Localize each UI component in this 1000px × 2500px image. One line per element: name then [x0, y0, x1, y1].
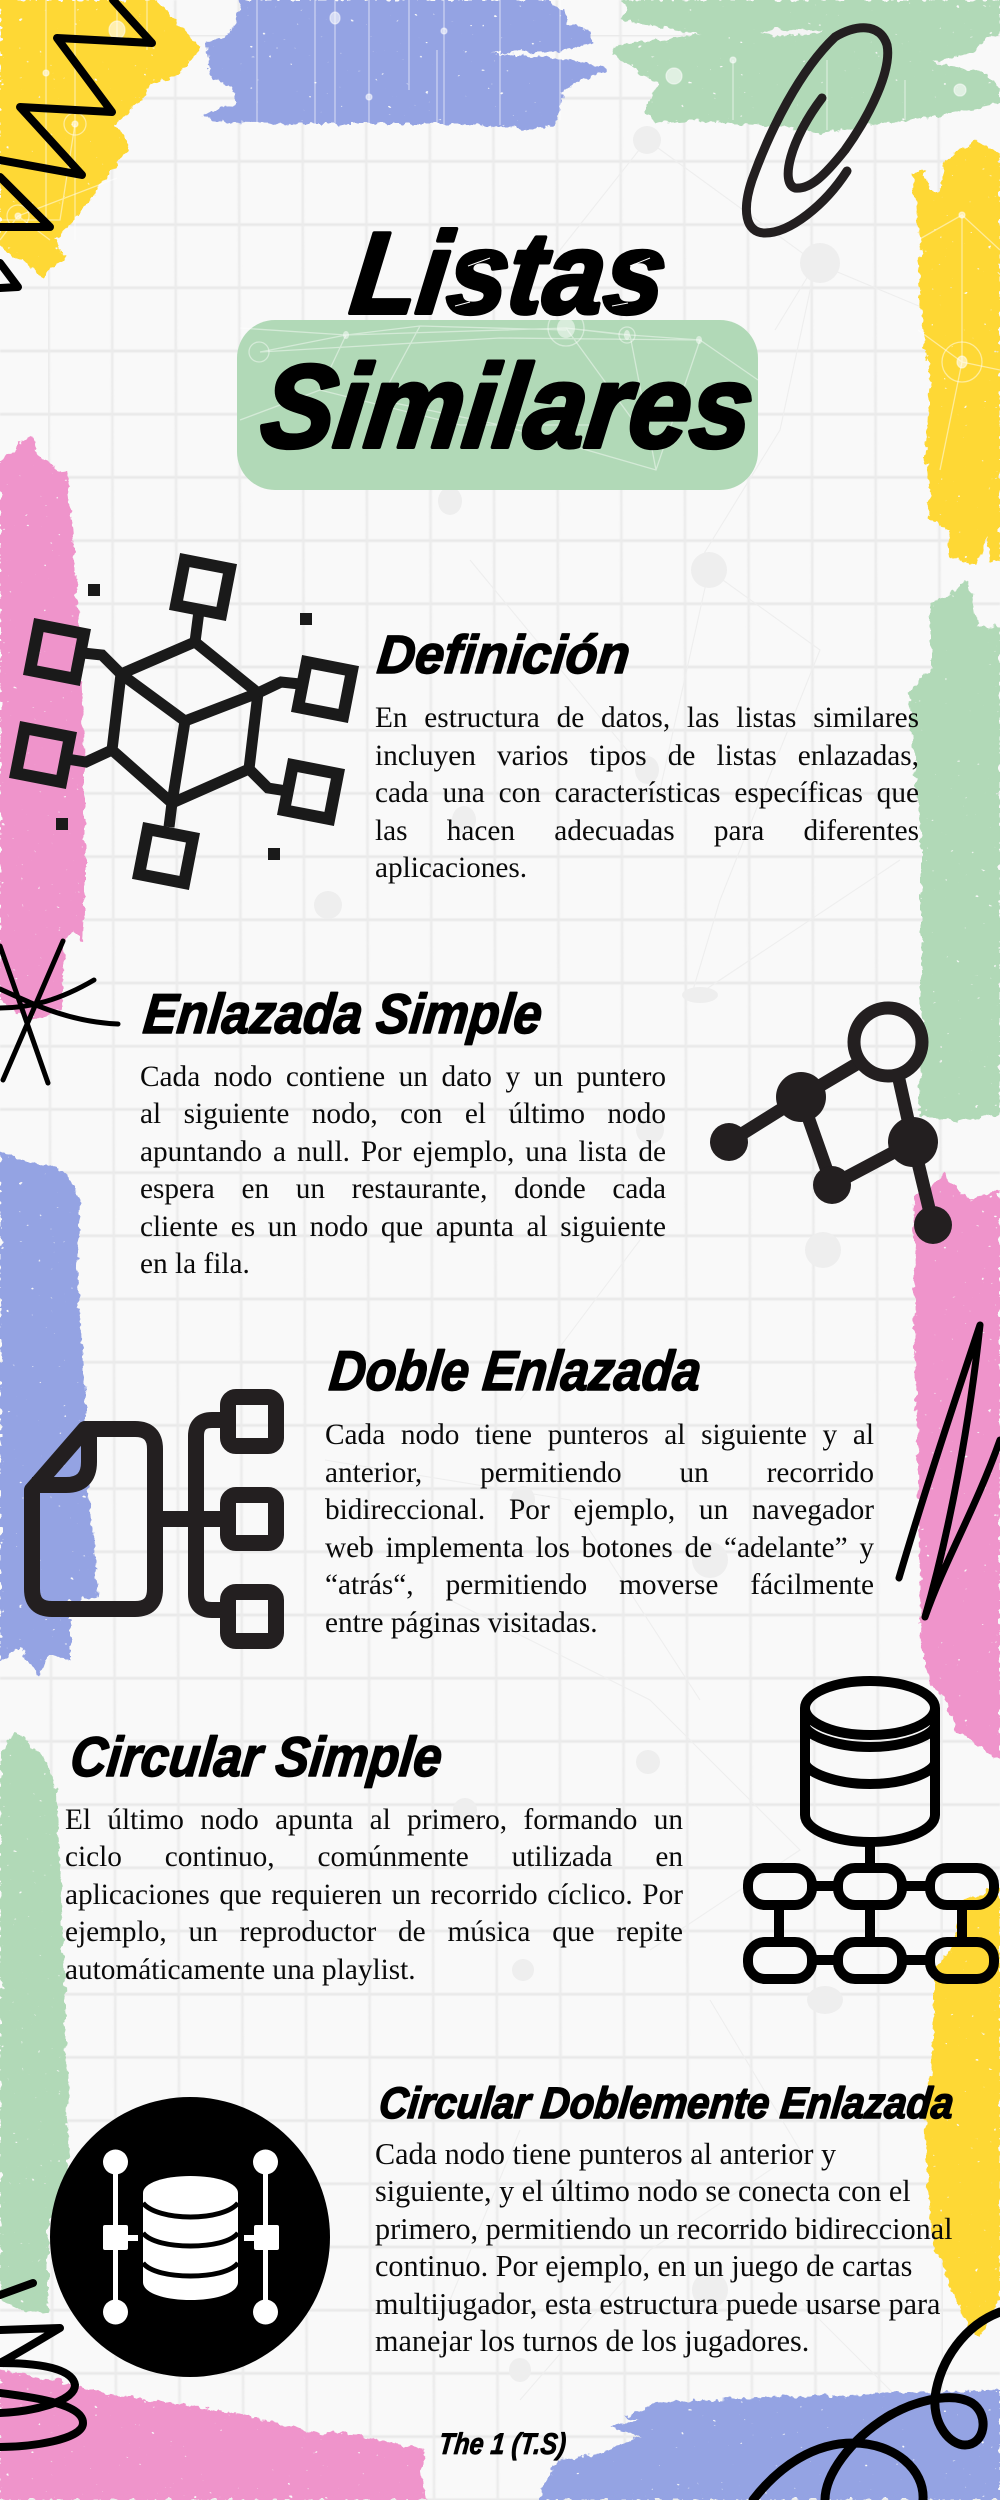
text: Doble Enlazada body: Cada nodo tiene punteros al siguiente y al	[325, 1419, 874, 1451]
text: Circular Simple body: automáticamente una playlist.	[65, 1954, 416, 1986]
text: Circular Simple body: aplicaciones que requieren un recorrido cíclico. Por	[65, 1878, 683, 1910]
brush: blue left	[0, 1152, 99, 1675]
heading: Circular Doblemente Enlazada: Circular Doblemente Enlazada	[377, 2079, 956, 2128]
text: Definición body: cada una con características específicas que	[375, 777, 919, 809]
text: Enlazada Simple body: cliente es un nodo que apunta al siguiente	[140, 1210, 666, 1242]
icon: hexagon network	[16, 560, 352, 883]
brush: blue top	[202, 0, 606, 129]
brush: pink bottom	[0, 2370, 427, 2500]
doodle: curl bottom right	[753, 2312, 1000, 2500]
text: Definición body	[375, 702, 919, 884]
text: Circular Doblemente Enlazada body: manejar los turnos de los jugadores.	[375, 2324, 809, 2358]
text: Circular Doblemente Enlazada body	[375, 2136, 953, 2358]
text: Doble Enlazada body: bidireccional. Por ejemplo, un navegador	[325, 1494, 874, 1526]
text: Doble Enlazada body: “atrás“, permitiendo moverse fácilmente	[325, 1569, 874, 1601]
brush: yellow top left	[0, 0, 200, 280]
text: Circular Simple body	[65, 1804, 683, 1986]
text: Definición body: En estructura de datos, las listas similares	[375, 702, 919, 734]
brush: pink right	[914, 1171, 1000, 1762]
text: Circular Simple body: ejemplo, un reproductor de música que repite	[65, 1916, 683, 1948]
text: Doble Enlazada body: anterior, permitiendo un recorrido	[325, 1456, 874, 1488]
text: Circular Doblemente Enlazada body: Cada nodo tiene punteros al anterior y	[375, 2136, 836, 2170]
footer credit: The 1 (T.S)	[437, 2428, 568, 2461]
heading: Definición: Definición	[375, 625, 633, 685]
text: Doble Enlazada body	[325, 1419, 874, 1638]
text: Circular Doblemente Enlazada body: siguiente, y el último nodo se conecta con el	[375, 2174, 911, 2208]
doodle: scrawl right	[899, 1325, 1000, 1617]
text: Circular Doblemente Enlazada body: primero, permitiendo un recorrido bidireccional	[375, 2212, 953, 2246]
text: Definición body: las hacen adecuadas para diferentes	[375, 814, 919, 846]
text: Circular Simple body: ciclo continuo, comúnmente utilizada en	[65, 1841, 683, 1873]
heading: Circular Simple: Circular Simple	[68, 1725, 445, 1788]
text: Enlazada Simple body: espera en un restaurante, donde cada	[140, 1173, 666, 1205]
doodle: paperclip	[746, 28, 888, 233]
brush: green top	[612, 0, 1000, 133]
text: Enlazada Simple body: Cada nodo contiene un dato y un puntero	[140, 1060, 666, 1092]
title backing: green rounded box	[237, 310, 758, 490]
heading: Doble Enlazada: Doble Enlazada	[327, 1339, 704, 1402]
title: Listas: Listas	[345, 208, 674, 338]
brush: green left	[0, 1730, 70, 2313]
network overlay on brush strokes	[0, 0, 1000, 470]
doodle: asterisk left	[0, 941, 118, 1083]
text: Enlazada Simple body	[140, 1060, 666, 1280]
text: Definición body: aplicaciones.	[375, 852, 527, 884]
heading: Enlazada Simple: Enlazada Simple	[141, 982, 545, 1045]
brush: yellow bottom right	[925, 1886, 1000, 2338]
icon: black circle database	[50, 2097, 330, 2377]
text: Doble Enlazada body: entre páginas visitadas.	[325, 1606, 598, 1638]
text: Circular Simple body: El último nodo apunta al primero, formando un	[65, 1804, 683, 1836]
text: Enlazada Simple body: al siguiente nodo, con el último nodo	[140, 1098, 666, 1130]
text: Enlazada Simple body: en la fila.	[140, 1248, 250, 1280]
text: Circular Doblemente Enlazada body: multijugador, esta estructura puede usarse para	[375, 2286, 940, 2320]
brush: blue bottom	[536, 2390, 1000, 2500]
title: Similares: Similares	[255, 341, 761, 473]
text: Doble Enlazada body: web implementa los botones de “adelante” y	[325, 1532, 874, 1564]
brush: white streak on green	[760, 29, 825, 36]
doodle: zigzag top left	[0, 0, 152, 288]
text: Definición body: incluyen varios tipos de listas enlazadas,	[375, 740, 919, 772]
brush: green right	[909, 580, 1000, 1121]
faint network background	[314, 126, 1000, 2400]
text: Circular Doblemente Enlazada body: continuo. Por ejemplo, en un juego de cartas	[375, 2249, 912, 2283]
icon: molecule graph	[710, 1008, 952, 1244]
icon: database with nodes	[748, 1681, 994, 1979]
brush: yellow right top	[912, 140, 1000, 565]
doodle: spiral bottom left	[0, 2283, 83, 2447]
brush: pink left	[0, 437, 85, 1020]
text: Enlazada Simple body: apuntando a null. Por ejemplo, una lista de	[140, 1136, 666, 1168]
icon: document tree	[32, 1397, 276, 1641]
